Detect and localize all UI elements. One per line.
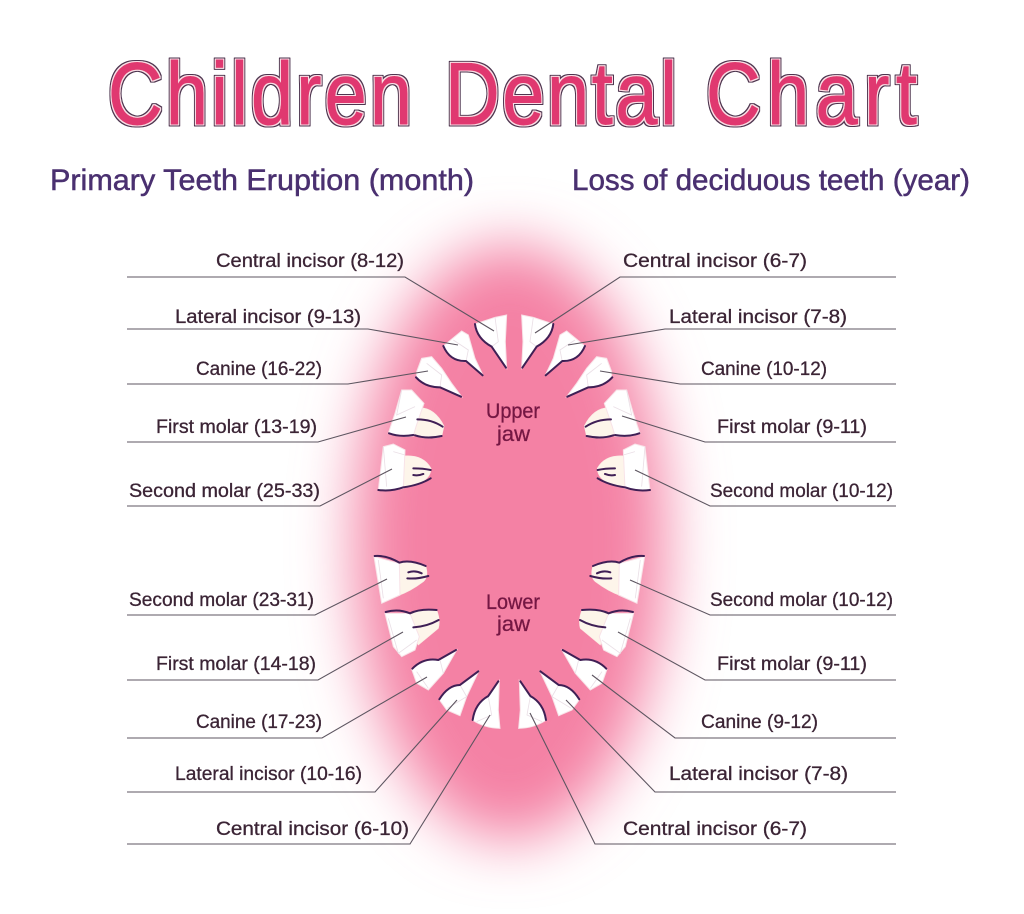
- label: lower jaw: jaw: [496, 613, 531, 636]
- label: upper jaw: jaw: [496, 423, 531, 446]
- title: Chart: [706, 46, 917, 143]
- callout: first molar 14-18: First molar (14-18): [156, 654, 316, 675]
- callout: central incisor 6-7 upper: [535, 251, 896, 333]
- callout: canine 17-23: [127, 677, 427, 738]
- label: lower jaw: Lower: [486, 591, 540, 614]
- label: lower jaw: [486, 591, 540, 636]
- left callouts: lower jaw eruption: [127, 579, 490, 844]
- callout: central incisor 6-10: [127, 715, 490, 844]
- callout: lateral incisor 9-13: [127, 307, 458, 345]
- callout: central incisor 8-12: [127, 251, 494, 331]
- callout: lateral incisor 7-8 lower: [566, 700, 896, 792]
- jaw background glow: [355, 245, 665, 840]
- lower left teeth: [374, 556, 500, 728]
- callout: central incisor 6-7 lower: Central incisor (6-7): [623, 819, 807, 840]
- callout: canine 9-12 lower: Canine (9-12): [701, 712, 818, 733]
- callout: central incisor 6-7 upper: Central incisor (6-7): [623, 251, 807, 272]
- callout: central incisor 6-10: Central incisor (6-10): [216, 819, 409, 840]
- heading: primary teeth eruption: Primary Teeth Eruption (month): [50, 164, 474, 197]
- callout: first molar 9-11 upper: [622, 416, 896, 442]
- upper left teeth: [378, 315, 507, 491]
- callout: lateral incisor 10-16: Lateral incisor (10-16): [175, 764, 362, 785]
- callout: canine 10-12 upper: [600, 359, 896, 384]
- callout: lateral incisor 7-8 upper: Lateral incisor (7-8): [669, 307, 847, 328]
- callout: second molar 10-12 lower: Second molar (10-12): [710, 590, 893, 611]
- callout: lateral incisor 7-8 lower: Lateral incisor (7-8): [669, 764, 848, 785]
- callout: lateral incisor 9-13: Lateral incisor (9-13): [175, 307, 361, 328]
- callout: canine 10-12 upper: Canine (10-12): [701, 359, 827, 380]
- title: Dental: [445, 46, 677, 143]
- left callouts: upper jaw eruption: [127, 251, 494, 506]
- upper right teeth: [522, 315, 650, 491]
- lower right teeth: [519, 556, 645, 728]
- callout: central incisor 8-12: Central incisor (8-12): [216, 251, 404, 272]
- callout: second molar 10-12 lower: [630, 580, 896, 615]
- upper jaw teeth: [378, 315, 650, 491]
- callout: first molar 9-11 lower: First molar (9-11): [717, 654, 867, 675]
- heading: loss of deciduous teeth: Loss of deciduous teeth (year): [572, 164, 970, 197]
- callout: canine 16-22: Canine (16-22): [196, 359, 322, 380]
- callout: first molar 9-11 upper: First molar (9-11): [717, 417, 867, 438]
- callout: second molar 10-12 upper: [635, 470, 896, 506]
- callout: canine 17-23: Canine (17-23): [196, 712, 322, 733]
- callout: canine 9-12 lower: [592, 675, 896, 738]
- callout: second molar 23-31: Second molar (23-31): [129, 590, 314, 611]
- callout: first molar 13-19: First molar (13-19): [156, 417, 317, 438]
- callout: lateral incisor 10-16: [127, 700, 457, 792]
- callout: second molar 25-33: Second molar (25-33): [129, 481, 320, 502]
- callout: second molar 25-33: [127, 469, 392, 506]
- callout: first molar 14-18: [127, 632, 403, 680]
- callout: first molar 13-19: [127, 417, 406, 442]
- callout: canine 16-22: [127, 359, 428, 384]
- callout: first molar 9-11 lower: [618, 632, 896, 680]
- label: upper jaw: [486, 400, 540, 446]
- title: Children: [108, 46, 412, 143]
- title: [108, 46, 917, 143]
- callout: lateral incisor 7-8 upper: [568, 307, 896, 345]
- label: upper jaw: Upper: [486, 400, 540, 423]
- callout: second molar 23-31: [127, 579, 387, 615]
- lower jaw teeth: [374, 556, 645, 728]
- right callouts: upper jaw loss: [535, 251, 896, 506]
- callout: central incisor 6-7 lower: [530, 713, 896, 844]
- right callouts: lower jaw loss: [530, 580, 896, 844]
- callout: second molar 10-12 upper: Second molar (10-12): [710, 481, 893, 502]
